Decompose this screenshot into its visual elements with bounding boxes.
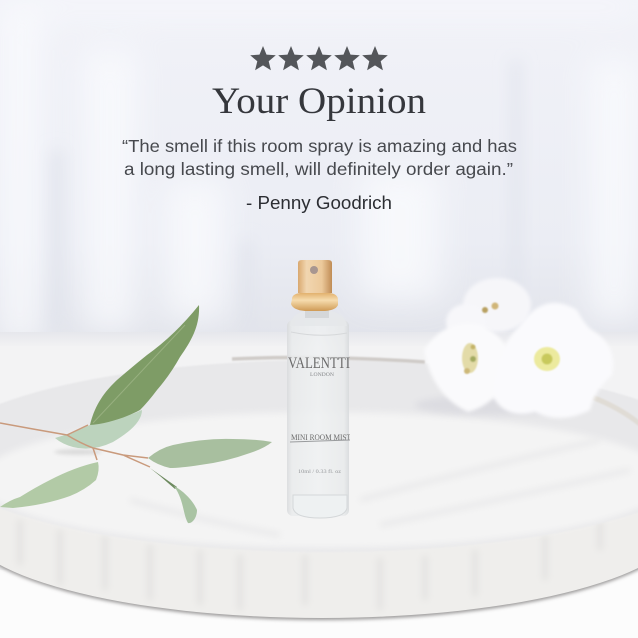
neck [305, 309, 329, 318]
right flower [492, 303, 613, 418]
review quote: “The smell if this room spray is amazing and has [122, 136, 517, 156]
five star rating [250, 46, 388, 70]
review quote: a long lasting smell, will definitely order again.” [124, 159, 513, 179]
right leaf [148, 439, 272, 468]
bottle body [287, 320, 349, 516]
flowers [415, 278, 613, 418]
brand name: VALENTTI [288, 355, 350, 372]
pale leaf behind [55, 410, 142, 449]
gold collar [291, 293, 338, 311]
plate shadow [0, 565, 638, 622]
marble plate [0, 358, 638, 620]
title: Your Opinion [212, 81, 426, 122]
plate top surface [0, 361, 638, 454]
bottle label text [288, 355, 352, 475]
stem [0, 423, 150, 467]
left flower [424, 324, 511, 412]
marble grain [20, 515, 600, 610]
back flower [446, 278, 531, 340]
curled leaf [150, 468, 177, 489]
plate inner area [0, 412, 638, 548]
reviewer name: - Penny Goodrich [246, 193, 392, 213]
perfume bottle [287, 260, 352, 518]
leaf shadows [54, 449, 102, 455]
background: table surface [0, 332, 638, 345]
eucalyptus branch [0, 305, 272, 523]
brand location: LONDON [310, 372, 334, 378]
gold cap [298, 260, 332, 293]
lower left leaf [0, 462, 99, 508]
large green leaf [90, 305, 199, 425]
plate side wall [0, 522, 638, 618]
background: white curtain [0, 60, 638, 332]
product name: MINI ROOM MIST [291, 432, 352, 442]
flower shadow [415, 395, 575, 415]
volume: 10ml / 0.33 fl. oz [298, 468, 342, 475]
review quote [122, 136, 517, 179]
